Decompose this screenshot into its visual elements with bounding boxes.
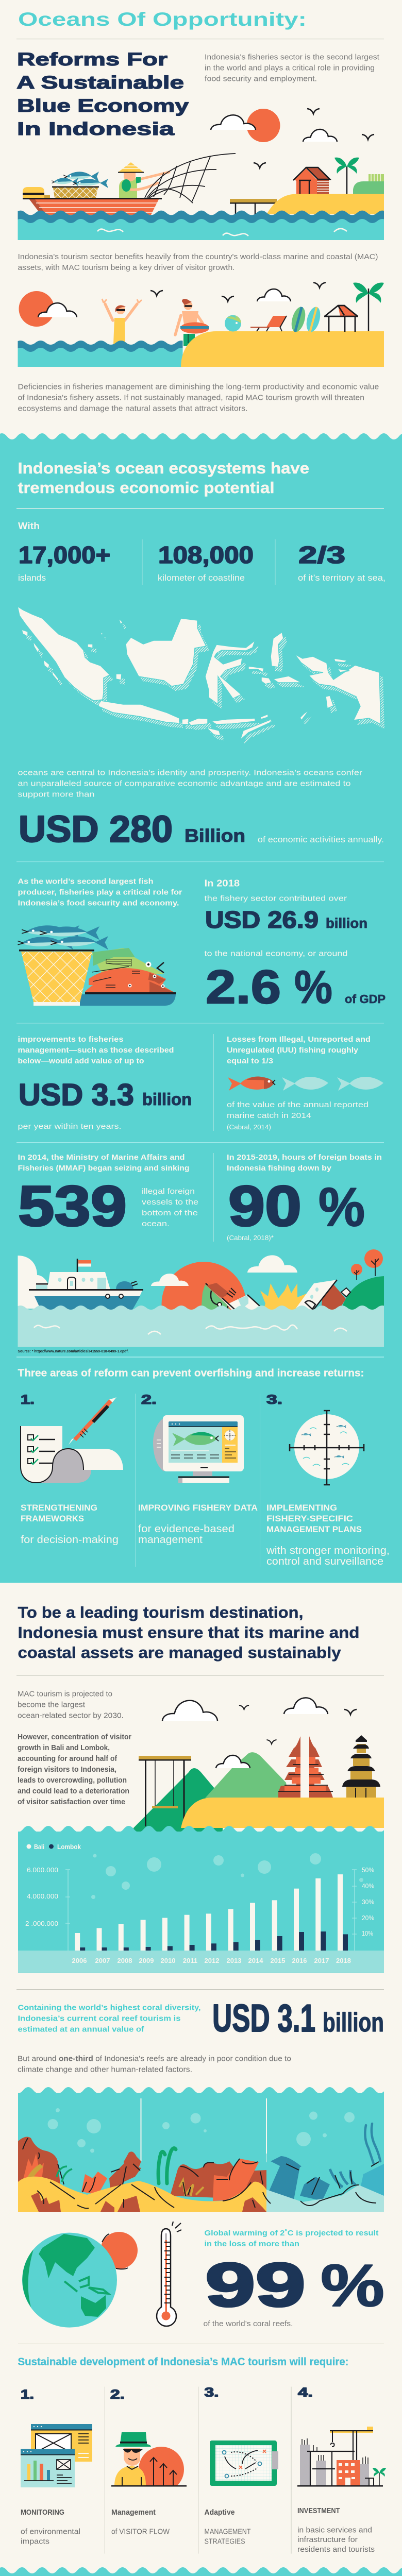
- reform 2: improving fishery data: [138, 1393, 258, 1546]
- year labels: 2009: [139, 1957, 154, 1964]
- year labels: 2010: [161, 1957, 175, 1964]
- intro text: deficiencies: [18, 383, 379, 413]
- text and icons: IUU fishing losses: equal to 1/3: [227, 1057, 273, 1065]
- reform 3: fishery-specific plans: control and surveillance: [266, 1556, 383, 1567]
- text and icons: IUU fishing losses: [227, 1035, 383, 1131]
- text and icons: IUU fishing losses: Losses from Illegal, Unreported and: [227, 1035, 371, 1044]
- requirement 4: investment: [297, 2385, 386, 2554]
- stat: coral loss 99 percent: of the world’s coral reefs.: [203, 2319, 293, 2328]
- reform 3: fishery-specific plans: [266, 1393, 390, 1567]
- stat: fishery GDP contribution: In 2018: [204, 878, 240, 888]
- heading: sustainable development: Sustainable development of Indonesia’s MAC tourism will require:: [18, 2356, 348, 2368]
- stat: coral reef tourism value: USD 3.1: [212, 1996, 315, 2040]
- stat: islands: islands: [18, 573, 46, 583]
- reform 2: improving fishery data: 2.: [141, 1393, 157, 1407]
- text: fisheries management value: [18, 1035, 192, 1131]
- stat: coral loss 99 percent: in the loss of more than: [204, 2240, 299, 2248]
- intro text: fisheries: in the world and plays a critical role in providing: [205, 64, 375, 72]
- year labels: [72, 1957, 351, 1964]
- intro text: tourism: [18, 252, 378, 272]
- illustration: fisherman casting net: [18, 108, 384, 240]
- stat: coral reef tourism value: billion: [323, 2008, 384, 2038]
- stat: fishery GDP contribution: 2.6: [206, 961, 281, 1013]
- text: fisheries management value: management—such as those described: [18, 1046, 174, 1055]
- reform 1: strengthening frameworks: STRENGTHENING: [21, 1503, 97, 1513]
- key figures: [18, 521, 386, 585]
- right axis labels: 40%: [362, 1882, 374, 1890]
- stat: fishery GDP contribution: the fishery sector contributed over: [204, 894, 347, 903]
- illustration: coral reef: [3, 2087, 402, 2212]
- title: Oceans Of Opportunity:: [18, 9, 307, 30]
- year labels: 2017: [314, 1957, 329, 1964]
- stat: USD 280 Billion: of economic activities annually.: [258, 835, 384, 844]
- text: concentration of visitors: [18, 1733, 131, 1806]
- text: fish producer: [18, 877, 182, 908]
- stat: islands: [18, 541, 110, 583]
- requirement 2: visitor flow: Management: [111, 2508, 156, 2517]
- text: fisheries management value: per year within ten years.: [18, 1122, 122, 1131]
- heading: ocean ecosystems: [18, 459, 309, 497]
- stat: territory: [298, 541, 386, 583]
- illustration: beach tourism: [0, 282, 402, 367]
- icon: strategy board: [210, 2441, 278, 2486]
- text: fisheries management value: below—would add value of up to: [18, 1057, 144, 1065]
- requirement 3: adaptive strategies: STRATEGIES: [204, 2537, 245, 2546]
- text: concentration of visitors: accounting for around half of: [18, 1754, 118, 1763]
- stat: coastline: kilometer of coastline: [158, 573, 245, 583]
- main heading: Blue Economy: [17, 96, 189, 116]
- text and icons: IUU fishing losses: Unregulated (IUU) fishing roughly: [227, 1046, 359, 1055]
- stat: fishery GDP contribution: to the national economy, or around: [204, 950, 347, 958]
- requirement 1: monitoring: MONITORING: [21, 2508, 64, 2517]
- heading: tourism destination: To be a leading tourism destination,: [18, 1603, 303, 1621]
- coral: healthy right: [266, 2124, 384, 2212]
- stat: 90 percent down: (Cabral, 2018)*: [227, 1234, 274, 1242]
- stat: 539 vessels: Fisheries (MMAF) began seizing and sinking: [18, 1164, 190, 1173]
- reform 3: fishery-specific plans: IMPLEMENTING: [266, 1503, 337, 1513]
- requirement 2: visitor flow: of VISITOR FLOW: [111, 2528, 170, 2536]
- panel: teal marine debris section background: [0, 2567, 402, 2576]
- year labels: 2015: [271, 1957, 285, 1964]
- text: reefs in poor condition: But around one-third of Indonesia's reefs are already in poor condition due to: [18, 2055, 291, 2063]
- text: concentration of visitors: of visitor satisfaction over time: [18, 1798, 125, 1806]
- requirement 1: monitoring: of environmental: [21, 2528, 80, 2536]
- text: reefs in poor condition: [18, 2055, 291, 2074]
- illustration: Bali landscape with temples: [3, 1698, 402, 1834]
- text: concentration of visitors: foreign visitors to Indonesia,: [18, 1765, 116, 1774]
- map of Indonesia: [18, 606, 384, 745]
- stat: territory: of it’s territory at sea,: [298, 573, 386, 583]
- stat: 90 percent down: In 2015-2019, hours of foreign boats in: [227, 1153, 382, 1162]
- stat: USD 280 Billion: USD 280: [19, 809, 173, 850]
- stat: coral loss 99 percent: %: [321, 2252, 384, 2319]
- icon: tourist and arrows: [111, 2432, 187, 2496]
- requirement 3: adaptive strategies: 3.: [204, 2385, 219, 2400]
- text: oceans central: [18, 769, 362, 799]
- illustration: globe and sun: [22, 2232, 138, 2328]
- stat: USD 280 Billion: Billion: [185, 826, 245, 846]
- main heading: [16, 49, 189, 139]
- reform 2: improving fishery data: for evidence-based: [138, 1523, 234, 1535]
- legend: [27, 1843, 81, 1851]
- legend: Lombok: [57, 1843, 81, 1851]
- text: MAC tourism projection: become the largest: [18, 1700, 86, 1709]
- requirement 1: monitoring: 1.: [21, 2387, 34, 2402]
- key figures: With: [18, 521, 40, 531]
- requirement 2: visitor flow: 2.: [110, 2387, 125, 2402]
- reform 3: fishery-specific plans: FISHERY-SPECIFIC: [266, 1514, 353, 1523]
- year labels: 2007: [95, 1957, 110, 1964]
- stat: 90 percent down: %: [319, 1177, 365, 1238]
- intro text: fisheries: [205, 53, 380, 83]
- intro text: deficiencies: ecosystems and damage the natural assets that attract visitors.: [18, 404, 247, 413]
- left axis labels: [25, 1866, 58, 1927]
- stat: 539 vessels: In 2014, the Ministry of Marine Affairs and: [18, 1153, 185, 1162]
- requirement 4: investment: INVESTMENT: [297, 2506, 340, 2515]
- icon: monitor with fish: [153, 1415, 244, 1483]
- source note: Source: * https://www.nature.com/articles/s41559-018-0499-1.epdf.: [18, 1350, 129, 1353]
- stat: 90 percent down: 90: [228, 1175, 301, 1238]
- intro text: fisheries: food security and employment.: [205, 74, 317, 83]
- reform 3: fishery-specific plans: 3.: [266, 1393, 282, 1407]
- text: fisheries management value: billion: [142, 1090, 192, 1109]
- year labels: 2012: [205, 1957, 219, 1964]
- year labels: 2006: [72, 1957, 87, 1964]
- heading: tourism destination: coastal assets are managed sustainably: [18, 1643, 341, 1662]
- heading: tourism destination: Indonesia must ensure that its marine and: [18, 1623, 360, 1641]
- heading: ocean ecosystems: tremendous economic potential: [18, 479, 274, 497]
- year labels: 2008: [118, 1957, 132, 1964]
- stat: fishery GDP contribution: %: [294, 962, 332, 1013]
- bars: Lombok: [80, 1931, 348, 1951]
- text and icons: IUU fishing losses: marine catch in 2014: [227, 1111, 311, 1120]
- year labels: 2018: [336, 1957, 351, 1964]
- text: fish producer: As the world’s second largest fish: [18, 877, 154, 886]
- heading: tourism destination: [18, 1603, 360, 1662]
- intro text: deficiencies: Deficiencies in fisheries management are diminishing the long-term productivity and economic value: [18, 383, 379, 392]
- text and icons: IUU fishing losses: of the value of the annual reported: [227, 1100, 368, 1109]
- reform 3: fishery-specific plans: MANAGEMENT PLANS: [266, 1524, 362, 1534]
- coral: damaged left: [18, 2137, 266, 2201]
- left axis labels: 4.000.000: [27, 1892, 58, 1900]
- requirement 4: investment: in basic services and: [297, 2526, 372, 2535]
- text: oceans central: an unparalleled source of comparative economic advantage and are estimated to: [18, 779, 350, 788]
- requirement 2: visitor flow: [110, 2387, 187, 2536]
- text and icons: IUU fishing losses: (Cabral, 2014): [227, 1123, 271, 1131]
- right axis labels: 20%: [362, 1914, 374, 1922]
- stat: coral loss 99 percent: 99: [205, 2250, 306, 2319]
- bars: Bali: [75, 1874, 343, 1951]
- requirement 3: adaptive strategies: Adaptive: [204, 2508, 235, 2517]
- stat: 90 percent down: [227, 1153, 382, 1242]
- panel: teal fisheries section background: [0, 433, 402, 1583]
- stat: 539 vessels: vessels to the: [142, 1198, 198, 1207]
- reform 2: improving fishery data: management: [138, 1534, 203, 1546]
- stat: coral reef tourism value: Indonesia’s current coral reef tourism is: [18, 2014, 180, 2023]
- text: concentration of visitors: However, concentration of visitor: [18, 1733, 131, 1741]
- main heading: Reforms For: [17, 49, 168, 70]
- stat: coral loss 99 percent: Global warming of 2˚C is projected to result: [204, 2229, 378, 2238]
- stat: 539 vessels: bottom of the: [142, 1209, 198, 1217]
- reform 1: strengthening frameworks: FRAMEWORKS: [21, 1514, 84, 1523]
- left axis labels: 6.000.000: [27, 1866, 58, 1874]
- icon: checklist and pen: [21, 1397, 123, 1483]
- year labels: 2013: [227, 1957, 241, 1964]
- heading: three areas of reform: Three areas of reform can prevent overfishing and increase returns:: [18, 1367, 364, 1379]
- reform 1: strengthening frameworks: 1.: [21, 1393, 35, 1407]
- text: MAC tourism projection: MAC tourism is projected to: [18, 1690, 112, 1698]
- icon: surveillance reticle: [290, 1411, 364, 1485]
- text: concentration of visitors: leads to overcrowding, pollution: [18, 1776, 127, 1785]
- intro text: tourism: assets, with MAC tourism being a key driver of visitor growth.: [18, 263, 235, 272]
- intro text: deficiencies: of Indonesia's fishery assets. If not sustainably managed, rapid MAC tourism growth will threaten: [18, 394, 364, 402]
- icon: thermometer: [157, 2222, 181, 2326]
- text: oceans central: oceans are central to Indonesia's identity and prosperity. Indonesia’s oceans confer: [18, 769, 362, 777]
- requirement 3: adaptive strategies: MANAGEMENT: [204, 2528, 250, 2536]
- requirement 4: investment: 4.: [298, 2385, 313, 2400]
- reform 1: strengthening frameworks: for decision-making: [21, 1534, 119, 1546]
- stat: territory: 2/3: [298, 541, 345, 568]
- bar chart: visitor arrivals Bali and Lombok: [18, 1832, 384, 1973]
- icon: browser windows: [21, 2424, 92, 2487]
- year labels: 2014: [248, 1957, 263, 1964]
- illustration: fish basket and tray: [18, 925, 176, 1006]
- stat: coral reef tourism value: [18, 1996, 384, 2040]
- stat: fishery GDP contribution: USD 26.9: [205, 906, 319, 933]
- right axis labels: 30%: [362, 1898, 374, 1906]
- heading: ocean ecosystems: Indonesia’s ocean ecosystems have: [18, 459, 309, 477]
- text: reefs in poor condition: climate change and other human-related factors.: [18, 2065, 192, 2074]
- stat: 539 vessels: ocean.: [142, 1219, 170, 1228]
- intro text: fisheries: Indonesia's fisheries sector is the second largest: [205, 53, 380, 62]
- year labels: 2016: [292, 1957, 307, 1964]
- right axis labels: 10%: [362, 1929, 373, 1937]
- text: fish producer: Indonesia’s food security and economy.: [18, 899, 179, 908]
- stat: 539 vessels: 539: [18, 1175, 127, 1238]
- main heading: A Sustainable: [16, 73, 184, 93]
- text: fisheries management value: improvements to fisheries: [18, 1035, 124, 1044]
- text: MAC tourism projection: [18, 1690, 124, 1720]
- legend: Bali: [34, 1843, 44, 1851]
- stat: 539 vessels: [18, 1153, 198, 1238]
- stat: 90 percent down: Indonesia fishing down by: [227, 1164, 332, 1173]
- reform 2: improving fishery data: IMPROVING FISHERY DATA: [138, 1503, 258, 1513]
- text: MAC tourism projection: ocean-related sector by 2030.: [18, 1711, 124, 1720]
- text: fisheries management value: USD 3.3: [19, 1078, 134, 1112]
- text: concentration of visitors: growth in Bali and Lombok,: [18, 1743, 110, 1752]
- stat: coastline: 108,000: [158, 541, 254, 568]
- stat: coral reef tourism value: estimated at an annual value of: [18, 2025, 145, 2034]
- intro text: tourism: Indonesia's tourism sector benefits heavily from the country's world-class marine and coastal (MAC): [18, 252, 378, 261]
- text: oceans central: support more than: [18, 790, 95, 799]
- stat: 539 vessels: illegal foreign: [142, 1187, 195, 1196]
- requirement 4: investment: residents and tourists: [297, 2545, 375, 2554]
- requirement 4: investment: infrastructure for: [297, 2535, 358, 2544]
- text: concentration of visitors: and could lead to a deterioration: [18, 1787, 129, 1795]
- illustration: sinking illegal vessels: [0, 1249, 402, 1347]
- requirement 3: adaptive strategies: [204, 2385, 278, 2546]
- reform 1: strengthening frameworks: [21, 1393, 123, 1546]
- year labels: 2011: [183, 1957, 197, 1964]
- left axis labels: 2 .000.000: [25, 1920, 58, 1927]
- icon: construction site: [297, 2427, 386, 2486]
- stat: USD 280 Billion: [19, 809, 384, 850]
- stat: fishery GDP contribution: of GDP: [345, 992, 386, 1006]
- text: fish producer: producer, fisheries play a critical role for: [18, 888, 182, 896]
- stat: islands: 17,000+: [19, 541, 110, 568]
- right axis labels: [362, 1866, 374, 1937]
- stat: fishery GDP contribution: [204, 878, 386, 1013]
- stat: coastline: [158, 541, 254, 583]
- stat: fishery GDP contribution: billion: [326, 916, 367, 931]
- right axis labels: 50%: [362, 1866, 374, 1874]
- requirement 1: monitoring: impacts: [21, 2537, 49, 2546]
- main heading: In Indonesia: [17, 119, 175, 139]
- stat: coral loss 99 percent: [203, 2229, 384, 2328]
- stat: coral reef tourism value: Containing the world’s highest coral diversity,: [18, 2003, 201, 2012]
- requirement 1: monitoring: [21, 2387, 92, 2546]
- reform 3: fishery-specific plans: with stronger monitoring,: [266, 1545, 390, 1556]
